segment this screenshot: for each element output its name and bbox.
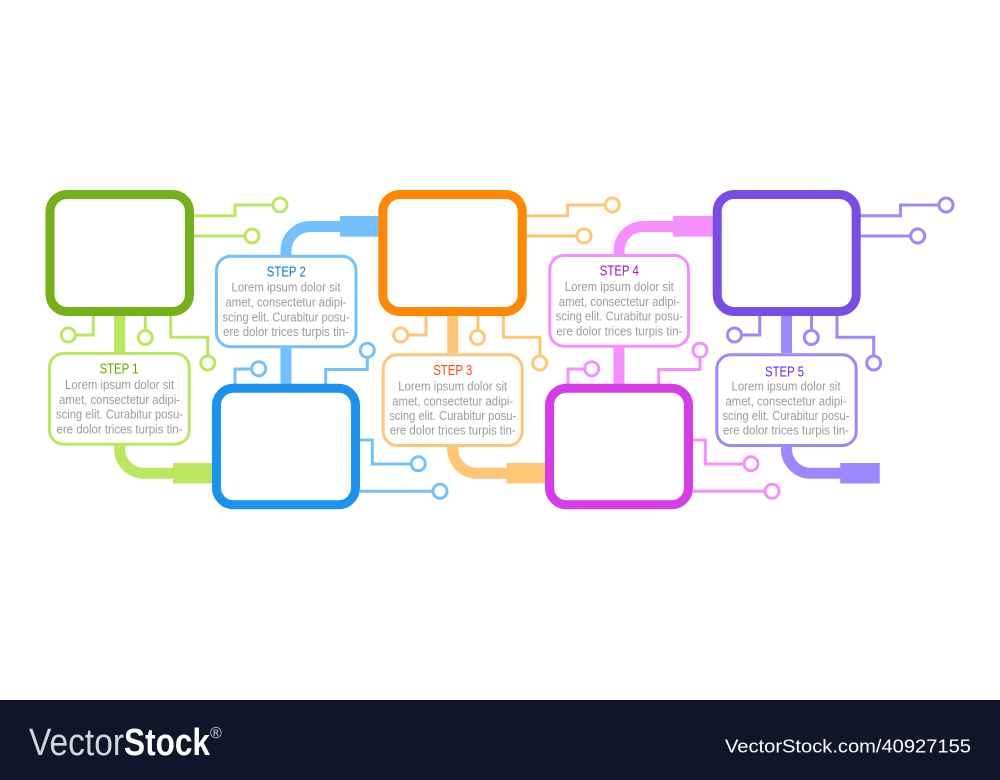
text card: step 2: Lorem ipsum dolor sit xyxy=(232,280,341,295)
step 5 module (purple) xyxy=(717,194,953,484)
text card: step 3: ere dolor trices turpis tin- xyxy=(390,423,516,438)
circuit traces: purple xyxy=(728,198,953,370)
text card: step 1: ere dolor trices turpis tin- xyxy=(56,421,182,436)
image frame: orange xyxy=(383,194,522,312)
circuit traces: blue xyxy=(235,343,447,498)
circuit traces: orange xyxy=(394,198,619,370)
image frame: magenta xyxy=(550,388,688,505)
step 1 module (green) xyxy=(50,194,287,484)
image frame: green xyxy=(50,194,190,312)
connector cable: step 4 to step 5 xyxy=(619,216,713,384)
text card: step 2: STEP 2 xyxy=(267,263,306,280)
text card: step 5: Lorem ipsum dolor sit xyxy=(732,378,841,393)
text card: step 4: ere dolor trices turpis tin- xyxy=(556,323,682,338)
text card: step 1: amet, consectetur adipi- xyxy=(59,392,180,407)
connector cable: step 3 to step 4 xyxy=(453,316,546,484)
text card: step 3: scing elit. Curabitur posu- xyxy=(389,408,516,423)
image frame: purple xyxy=(717,194,856,312)
text card: step 4: STEP 4 xyxy=(600,263,639,280)
footer logo: VectorStock xyxy=(29,722,222,764)
text card: step 2: amet, consectetur adipi- xyxy=(226,295,346,310)
footer logo: VectorStock: Stock xyxy=(124,722,211,764)
text card: step 2: ere dolor trices turpis tin- xyxy=(223,324,349,339)
text card: step 5: amet, consectetur adipi- xyxy=(726,393,846,408)
text card: step 1: Lorem ipsum dolor sit xyxy=(65,377,174,392)
connector cable: step 2 to step 3 xyxy=(286,216,379,384)
text card: step 4: amet, consectetur adipi- xyxy=(559,294,680,309)
text card: step 3 xyxy=(383,355,522,446)
text card: step 5: ere dolor trices turpis tin- xyxy=(723,423,849,438)
circuit traces: magenta xyxy=(568,343,779,498)
text card: step 5: scing elit. Curabitur posu- xyxy=(722,408,850,423)
text card: step 1: scing elit. Curabitur posu- xyxy=(56,407,183,422)
footer image id: VectorStock.com/40927155 xyxy=(725,736,971,756)
step 4 module (magenta) xyxy=(550,216,779,505)
footer logo: VectorStock: Vector xyxy=(29,722,124,764)
connector cable: step 5 tail xyxy=(786,316,880,484)
text card: step 4: scing elit. Curabitur posu- xyxy=(556,309,683,324)
text card: step 3: amet, consectetur adipi- xyxy=(392,393,513,408)
image frame: blue xyxy=(216,388,356,505)
connector cable: step 1 to step 2 xyxy=(120,316,213,484)
text card: step 3: Lorem ipsum dolor sit xyxy=(398,378,508,393)
footer bar xyxy=(0,700,1000,780)
text card: step 5 xyxy=(717,355,856,446)
text card: step 2: scing elit. Curabitur posu- xyxy=(222,309,350,324)
text card: step 1: STEP 1 xyxy=(100,361,138,378)
step 2 module (blue) xyxy=(216,216,447,505)
step 3 module (orange) xyxy=(383,194,619,484)
text card: step 4: Lorem ipsum dolor sit xyxy=(565,279,674,294)
text card: step 3: STEP 3 xyxy=(433,362,472,379)
text card: step 1 xyxy=(50,354,189,444)
text card: step 4 xyxy=(550,256,688,346)
text card: step 5: STEP 5 xyxy=(765,363,804,380)
text card: step 2 xyxy=(216,256,356,347)
footer logo: VectorStock: ® xyxy=(210,725,222,742)
circuit traces: green xyxy=(61,198,287,370)
